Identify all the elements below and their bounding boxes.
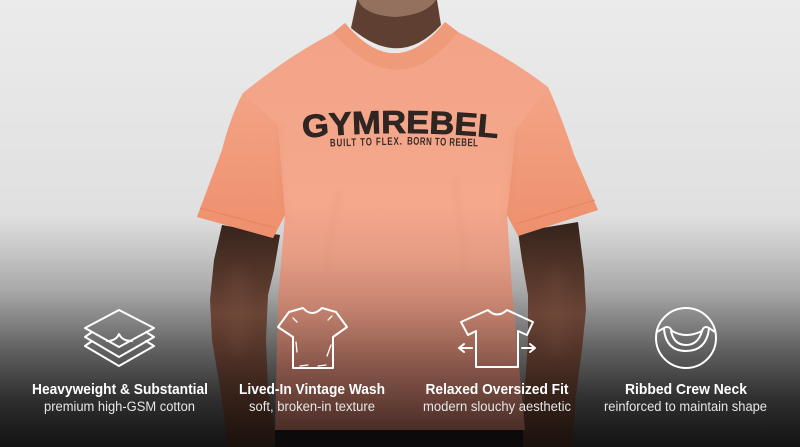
right arm muscle highlight — [544, 265, 568, 355]
icon: ribbed neck circle — [656, 308, 716, 368]
description: reinforced to maintain shape — [604, 399, 767, 414]
shirt logo — [303, 110, 498, 150]
left arm muscle highlight — [226, 265, 250, 355]
description: modern slouchy aesthetic — [423, 399, 571, 414]
collar — [333, 22, 458, 70]
left sleeve shading — [197, 93, 285, 238]
heading: Lived-In Vintage Wash — [239, 381, 385, 398]
heading: Ribbed Crew Neck — [625, 381, 748, 398]
tagline: BUILT TO FLEX. — [330, 135, 402, 150]
heading: Relaxed Oversized Fit — [426, 381, 568, 398]
right sleeve shading — [507, 87, 598, 236]
icon: distressed t-shirt — [278, 308, 347, 368]
wordmark: GYMREBEL — [303, 110, 498, 138]
feature: heavyweight — [32, 310, 208, 414]
chin — [358, 0, 436, 17]
icon: fabric layers — [85, 310, 154, 366]
icon: oversized t-shirt with arrows — [459, 310, 535, 367]
t-shirt body — [197, 22, 598, 430]
neck — [351, 0, 441, 48]
model — [197, 0, 598, 447]
description: soft, broken-in texture — [249, 399, 375, 414]
feature: oversized fit — [423, 310, 571, 414]
heading: Heavyweight & Substantial — [32, 381, 208, 398]
feature: vintage wash — [239, 308, 385, 414]
right arm — [518, 222, 586, 447]
fabric folds — [280, 125, 516, 270]
description: premium high-GSM cotton — [44, 399, 195, 414]
tagline — [330, 135, 478, 150]
sleeve hems — [200, 200, 595, 228]
left arm — [210, 225, 280, 447]
trousers — [275, 428, 523, 447]
feature: crew neck — [604, 308, 767, 414]
tagline: BORN TO REBEL — [407, 135, 478, 150]
